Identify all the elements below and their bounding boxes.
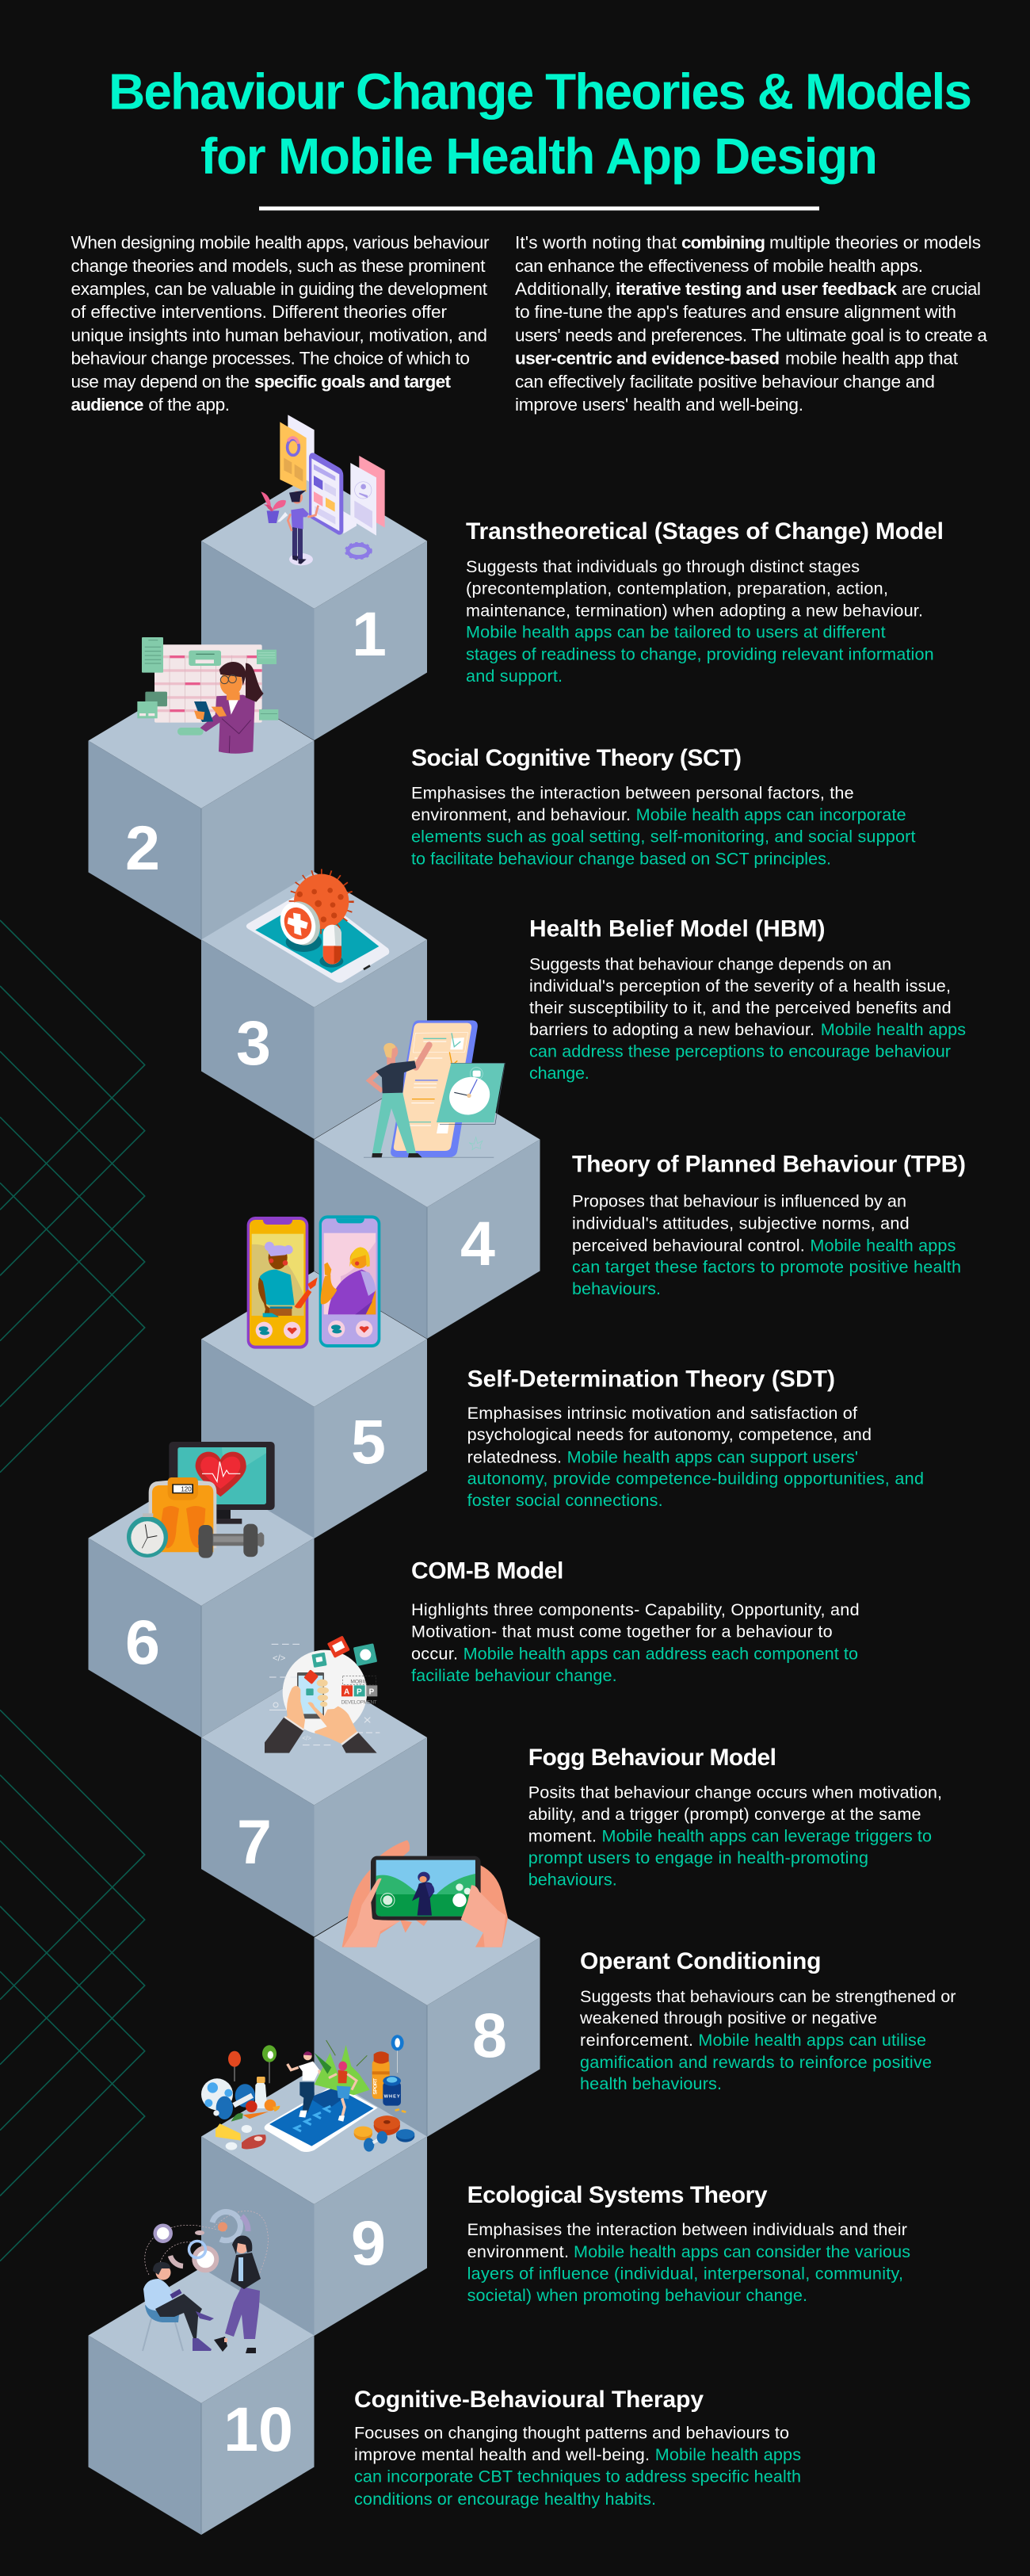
intro text: left column: of the app. [148,395,230,415]
cube 6 [89,1470,314,1737]
decorative line pattern: lower left [0,1710,145,2261]
description: individual's perception of the severity of a health issue, [529,976,951,996]
description: faciliate behaviour change. [411,1665,617,1685]
description: elements such as goal setting, self-monitoring, and social support [411,826,916,846]
description: environment. [467,2242,569,2261]
description: weakened through positive or negative [579,2008,877,2028]
description: Mobile health apps [810,1236,956,1256]
heading: Theory of Planned Behaviour (TPB) [572,1152,966,1178]
intro text: left column: of effective interventions. Different theories offer [71,302,447,322]
title: Behaviour Change Theories & Models [109,63,972,120]
description: barriers to adopting a new behaviour. [529,1019,814,1039]
description: Posits that behaviour change occurs when motivation, [528,1782,942,1802]
cube 1 [201,473,427,740]
icon: heart monitor, scale, stopwatch, dumbbell [127,1442,275,1558]
icon: person with app screens [261,415,385,565]
icon: hands holding phone with app icons: </> [302,1734,311,1741]
step 9: Ecological Systems Theory [201,2035,910,2336]
intro text: right column: user-centric and evidence-based [515,349,780,369]
description: behaviours. [528,1869,617,1890]
description [466,556,934,686]
description: Suggests that behaviours can be strengthened or [580,1986,956,2006]
heading: Ecological Systems Theory [467,2182,768,2208]
description: environment, and behaviour. [411,805,631,824]
description [411,783,916,869]
icon: hands holding game tablet [342,1840,508,1947]
heading: Self-Determination Theory (SDT) [467,1366,835,1392]
description: Mobile health apps can incorporate [636,805,906,824]
number 3: 3 [236,1007,271,1078]
title underline [259,206,819,211]
cube 10 [89,2268,314,2535]
intro text: left column: When designing mobile health apps, various behaviour [71,233,490,253]
icon: heart monitor, scale, stopwatch, dumbbell: 120 [181,1486,192,1493]
intro text: right column: It's worth noting that [515,233,677,253]
heading: Cognitive-Behavioural Therapy [354,2387,704,2413]
description: Mobile health apps [655,2444,801,2464]
intro text: left column: unique insights into human behaviour, motivation, and [71,325,487,345]
icon: hands holding phone with app icons [265,1635,380,1753]
intro text: right column: are crucial [902,279,981,299]
intro text: right column: Additionally, [515,279,612,299]
icon: hands holding phone with app icons: P [357,1688,362,1697]
intro text: right column [515,233,987,415]
description: occur. [411,1643,458,1663]
description: Emphasises the interaction between individuals and their [467,2219,907,2239]
description: prompt users to engage in health-promoting [528,1848,868,1867]
description [467,1403,924,1510]
description: change. [529,1063,589,1083]
description: Proposes that behaviour is influenced by an [572,1191,906,1210]
description: (precontemplation, contemplation, preparation, action, [466,579,888,598]
step 10: Cognitive-Behavioural Therapy [89,2211,801,2535]
intro text: right column: multiple theories or models [769,233,981,253]
description [467,2219,910,2305]
description [354,2423,801,2509]
step 4: Theory of Planned Behaviour [314,1020,966,1339]
heading: Operant Conditioning [580,1948,821,1974]
cube 8 [314,1870,540,2137]
intro text: left column: audience [71,395,144,415]
icon: fitness and nutrition on phone [201,2035,414,2152]
step 5: Self-Determination Theory [201,1215,924,1538]
icon: two phones with video-calling women [247,1215,380,1349]
number 9: 9 [351,2207,386,2278]
description: can incorporate CBT techniques to address specific health [354,2467,801,2486]
step 6: COM-B Model [89,1442,860,1737]
intro text: right column: can enhance the effectiveness of mobile health apps. [515,256,923,276]
description: maintenance, termination) when adopting a new behaviour. [466,601,923,621]
number 10: 10 [223,2394,293,2464]
description: Mobile health apps [821,1019,966,1039]
description [579,1986,956,2093]
title [109,63,972,185]
description: Emphasises intrinsic motivation and satisfaction of [467,1403,858,1423]
description: and support. [466,666,563,686]
description [411,1599,860,1685]
cube 4 [314,1072,540,1339]
description: moment. [528,1825,597,1845]
heading: COM-B Model [411,1557,563,1584]
intro text: right column: mobile health app that [785,349,959,369]
description: layers of influence (individual, interpersonal, community, [467,2264,903,2284]
description: their susceptibility to it, and the perceived benefits and [529,998,952,1018]
intro text: left column: use may depend on the [71,372,250,392]
description [529,954,966,1083]
description: health behaviours. [580,2073,722,2093]
intro text: right column: improve users' health and well-being. [515,395,803,415]
number 6: 6 [125,1607,160,1677]
description: Emphasises the interaction between personal factors, the [411,783,854,802]
number 8: 8 [472,2000,507,2070]
cube 9 [201,2069,427,2336]
intro text: right column: iterative testing and user feedback [616,279,897,299]
description: Mobile health apps can utilise [698,2030,926,2050]
description: Suggests that individuals go through distinct stages [466,556,860,576]
description: to facilitate behaviour change based on SCT principles. [411,848,831,869]
description: Mobile health apps can consider the various [574,2242,910,2261]
step 2: Social Cognitive Theory [89,637,916,940]
title: for Mobile Health App Design [200,128,878,185]
cube 5 [201,1271,427,1538]
intro text: right column: users' needs and preferences. The ultimate goal is to create a [515,325,987,345]
cube 7 [201,1669,427,1937]
icon: fitness and nutrition on phone: WHEY [384,2094,400,2099]
description: foster social connections. [467,1490,663,1510]
icon: hands holding phone with app icons: DEVELOPMENT [341,1699,377,1705]
heading: Social Cognitive Theory (SCT) [411,745,742,771]
description [528,1782,942,1890]
description: ability, and a trigger (prompt) converge at the same [528,1804,921,1824]
step 7: Fogg Behaviour Model [201,1635,942,1937]
description: perceived behavioural control. [572,1236,805,1256]
step 3: Health Belief Model [201,872,966,1139]
description: Mobile health apps can address each component to [464,1643,858,1663]
number 5: 5 [351,1406,386,1477]
description: can address these perceptions to encourage behaviour [529,1041,951,1061]
description: conditions or encourage healthy habits. [354,2489,656,2509]
description: societal) when promoting behaviour change. [467,2285,807,2305]
heading: Transtheoretical (Stages of Change) Model [466,518,944,545]
description: stages of readiness to change, providing relevant information [466,644,934,664]
intro text: left column: behaviour change processes. The choice of which to [71,349,470,369]
number 4: 4 [460,1208,495,1278]
icon: man checking list on giant phone with clock [364,1020,505,1157]
icon: hands holding phone with app icons: </> [273,1653,286,1663]
icon: two people talking with abstract circles [143,2211,268,2353]
intro text: left column: examples, can be valuable in guiding the development [71,279,488,299]
description: behaviours. [572,1278,661,1298]
description: psychological needs for autonomy, competence, and [467,1424,872,1444]
number 7: 7 [237,1806,272,1877]
description: improve mental health and well-being. [354,2444,650,2464]
cube 2 [89,673,314,940]
intro text: right column: to fine-tune the app's features and ensure alignment with [515,302,956,322]
decorative line pattern: upper left [0,920,145,1473]
intro text: left column: specific goals and target [254,372,451,392]
intro text: right column: combining [681,233,765,253]
icon: woman with schedule and tablet [137,637,278,754]
description: Mobile health apps can leverage triggers to [602,1825,932,1845]
intro text: left column [71,233,490,415]
icon: hands holding phone with app icons: MOBIL [350,1679,367,1684]
description: Mobile health apps can be tailored to users at different [466,622,886,642]
description: relatedness. [467,1447,562,1466]
intro text: left column: change theories and models, such as these prominent [71,256,486,276]
step 8: Operant Conditioning [314,1840,956,2137]
heading: Fogg Behaviour Model [528,1745,776,1771]
description: Suggests that behaviour change depends on an [529,954,891,973]
description: individual's attitudes, subjective norms, and [572,1213,910,1233]
intro text: right column: can effectively facilitate positive behaviour change and [515,372,935,392]
icon: hands holding phone with app icons: P [369,1688,375,1697]
icon: fitness and nutrition on phone: SPORT [373,2078,379,2095]
icon: hands holding phone with app icons: A [344,1688,349,1697]
description [572,1191,961,1298]
icon: phone with virus, medical badge and pill [246,872,389,983]
number 1: 1 [352,598,387,669]
description: Mobile health apps can support users' [567,1447,858,1466]
description: reinforcement. [580,2030,693,2050]
cube 3 [201,872,427,1139]
description: can target these factors to promote positive health [572,1257,961,1277]
description: Focuses on changing thought patterns and behaviours to [354,2423,789,2443]
description: Highlights three components- Capability, Opportunity, and [411,1599,860,1619]
step 1: Transtheoretical Model [201,415,944,740]
description: Motivation- that must come together for a behaviour to [411,1622,833,1641]
heading: Health Belief Model (HBM) [529,916,826,942]
description: autonomy, provide competence-building opportunities, and [467,1469,924,1489]
number 2: 2 [125,812,160,883]
description: gamification and rewards to reinforce positive [580,2052,932,2072]
